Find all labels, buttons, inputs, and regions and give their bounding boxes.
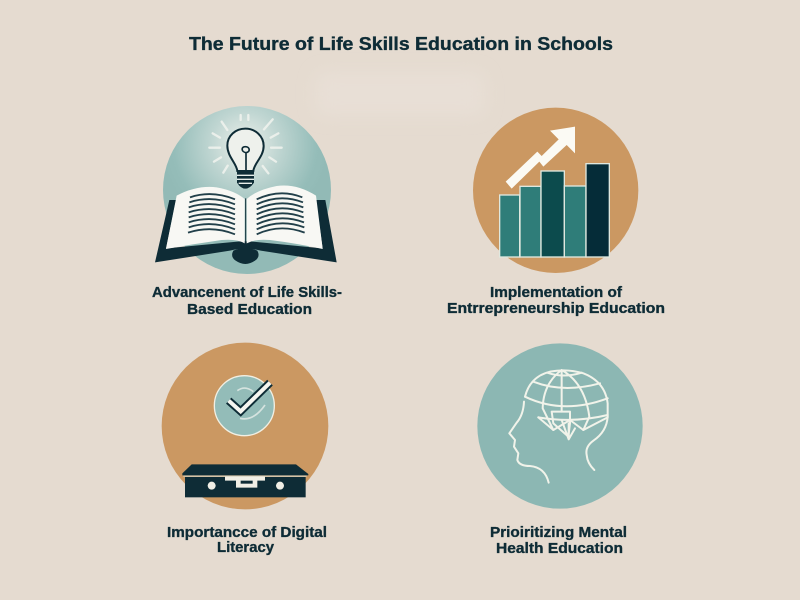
icon: orange circle with checkmark badge and briefcase bbox=[162, 343, 328, 509]
panel: digital literacy bbox=[162, 343, 328, 556]
label: life skills education: Advancenent of Life Skills- bbox=[152, 284, 342, 301]
label: mental health education: Health Education bbox=[496, 540, 623, 557]
label: life skills education: Based Education bbox=[187, 301, 312, 318]
icon: orange circle with bar chart and arrow bbox=[473, 108, 638, 273]
label: digital literacy: Literacy bbox=[217, 539, 275, 556]
label: digital literacy bbox=[167, 524, 327, 556]
label: entrepreneurship education: Entrrepreneurship Education bbox=[447, 300, 665, 317]
label: mental health education bbox=[490, 524, 627, 557]
icon: teal circle with head and globe bbox=[477, 343, 643, 509]
label: mental health education: Prioiritizing Mental bbox=[490, 524, 627, 541]
label: life skills education bbox=[152, 284, 342, 318]
label: entrepreneurship education: Implementation of bbox=[490, 284, 623, 301]
panel: life skills education bbox=[152, 106, 342, 318]
icon: light bulb bbox=[209, 115, 282, 189]
icon: briefcase bbox=[182, 464, 308, 497]
label: digital literacy: Importancce of Digital bbox=[167, 524, 327, 541]
panel: entrepreneurship education bbox=[447, 108, 665, 317]
icon: open book bbox=[155, 186, 337, 264]
bar chart bbox=[500, 164, 609, 257]
icon: globe bbox=[525, 370, 608, 430]
icon: head profile bbox=[509, 402, 549, 483]
title: The Future of Life Skills Education in Schools bbox=[189, 34, 613, 54]
icon: checkmark badge bbox=[214, 376, 274, 436]
panel: mental health education bbox=[477, 343, 643, 557]
icon: growth arrow bbox=[506, 127, 575, 189]
icon: teal circle with light bulb and open book bbox=[155, 106, 337, 274]
label: entrepreneurship education bbox=[447, 284, 665, 317]
